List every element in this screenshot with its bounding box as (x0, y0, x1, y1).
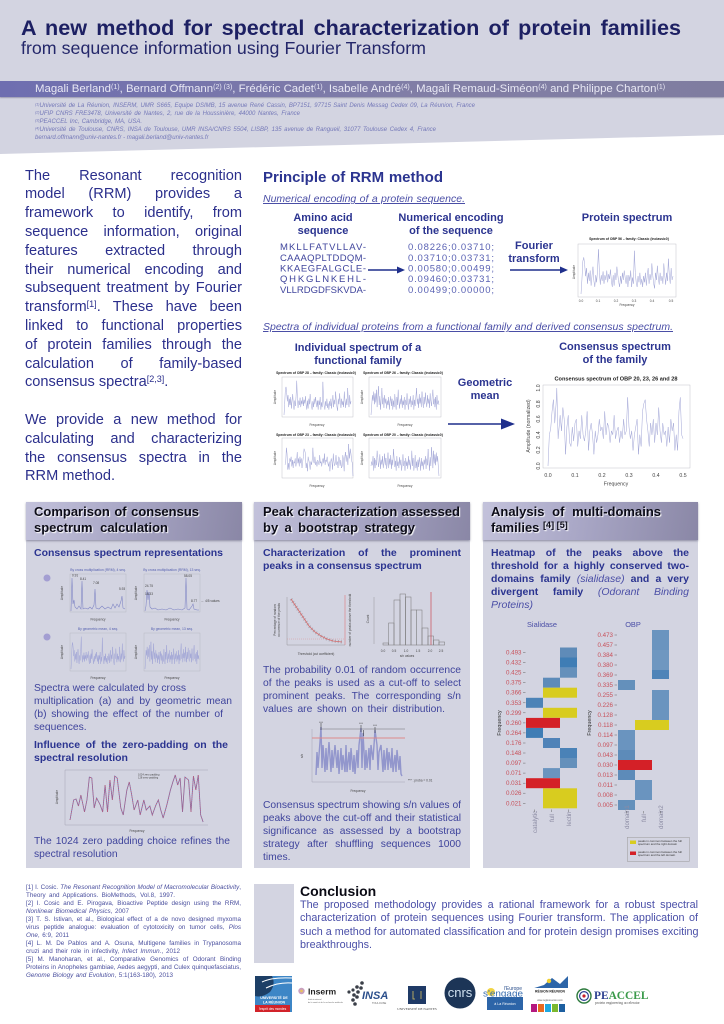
charts: individual spectra: Spectrum of OBP 20 – family: Classic (inclassic0) (363, 433, 443, 437)
conclusion text: breakthroughs. (300, 939, 372, 951)
column label: numerical encoding (398, 212, 504, 237)
heatmap: OBP: 0.380 (598, 662, 614, 669)
subheading: representations: Consensus spectrum representations (34, 547, 223, 559)
heatmap: sialidase: 0.148 (506, 750, 522, 757)
affiliations (35, 102, 475, 141)
label: fourier transform (508, 240, 560, 264)
text: heatmap description: divergent family (Odorant Binding (491, 586, 689, 598)
column label: amino acid (293, 212, 353, 237)
chart: s/n histogram: 1.0 (404, 649, 408, 653)
logo: Région Réunion (531, 976, 569, 1012)
arrow: encoding (368, 266, 405, 274)
conclusion text (300, 899, 698, 952)
panel title: multi-domains (491, 504, 661, 536)
affiliations: (3)PEACCEL Inc, Cambridge, MA, USA. (35, 118, 142, 125)
subtitle: from sequence information using Fourier Transform (21, 38, 426, 58)
chart: significant peaks (300, 721, 433, 793)
references: cruzi and their role in infectivity, Infect Immun., 2012 (26, 948, 180, 955)
heatmap: sialidase: 0.353 (506, 700, 522, 707)
heatmap: OBP: 0.457 (598, 642, 614, 649)
chart: zero padding (55, 770, 208, 833)
text: heatmap description: domains family (sialidase) and a very (491, 573, 689, 585)
conclusion text: characterization of protein sequences using Fourier transform. The application of (300, 912, 698, 924)
panel header: multi-domains (483, 502, 698, 540)
heatmap: sialidase: Sialidase (527, 620, 557, 629)
subheading: zero padding: spectral resolution (34, 752, 128, 764)
charts: individual spectra: Amplitude (360, 390, 364, 404)
chart: protein spectrum: 0.4 (650, 299, 654, 303)
heatmap: sialidase: 0.425 (506, 670, 522, 677)
text: spectra calculation (34, 683, 232, 733)
chart: protein spectrum: Spectrum of OBP 56 – family: Classic (inclassic0) (589, 237, 669, 241)
introduction text: sequence information, original (25, 224, 242, 240)
charts: consensus representations (44, 568, 220, 680)
text: spectra calculation: Spectra were calculated by cross (34, 683, 186, 694)
chart: significant peaks: *** (359, 722, 364, 726)
charts: consensus representations: By cross multiplication (RRM), 13 seq. (143, 568, 201, 572)
introduction text: subsequent treatment by Fourier (25, 280, 242, 296)
chart: random occurrence curve: number of peaks above the threshold (348, 593, 352, 646)
logo: Europe (483, 986, 523, 1010)
subheading: zero padding (34, 739, 228, 764)
heading: principle: Principle of RRM method (263, 168, 443, 186)
charts: individual spectra: Amplitude (273, 390, 277, 404)
chart: zero padding: 1024 zero padding (138, 772, 160, 776)
heatmap: sialidase: 0.071 (506, 770, 522, 777)
subheading: prominent peaks (263, 547, 461, 572)
column label: consensus spectrum (559, 340, 671, 366)
column label: individual spectrum: Individual spectrum of a (295, 342, 421, 354)
authors band (0, 81, 724, 97)
panel: comparison of consensus spectrum calculation (26, 502, 242, 868)
logos (250, 972, 660, 1016)
logo: Inserm (298, 986, 344, 1004)
introduction text: RRM method. (25, 468, 115, 484)
logo: INSA (347, 981, 388, 1006)
logo: INSA: TOULOUSE (372, 1001, 386, 1005)
charts: consensus representations: Frequency (164, 618, 180, 622)
charts: consensus representations: Amplitude (134, 586, 138, 600)
text: spectra calculation: multiplication (a) and by geometric mean (34, 696, 232, 707)
introduction text: framework to identify, from (25, 205, 242, 221)
panel header: peak characterization (254, 502, 470, 540)
title: A new method for spectral characterization of protein families (21, 14, 681, 40)
arrow: fourier (510, 266, 568, 274)
chart: protein spectrum: 0.1 (596, 299, 600, 303)
text: probability cut-off: prominent peaks. The corresponding s/n (263, 691, 461, 702)
references: Nonlinear Biomedical Physics, 2007 (26, 908, 129, 915)
heatmap: sialidase: 0.432 (506, 660, 522, 667)
chart: protein spectrum: 0.2 (614, 299, 618, 303)
charts: consensus representations: 0.91 (72, 574, 78, 578)
heatmap: OBP: 0.005 (598, 802, 614, 809)
text: probability cut-off (263, 665, 461, 715)
chart: significant peaks: *** : proba = 0.01 (408, 778, 433, 782)
chart: s/n histogram: 2.0 (428, 649, 432, 653)
logo: Université de La Réunion: l'esprit des mondes (259, 1007, 287, 1011)
charts: individual spectra: Amplitude (273, 451, 277, 465)
chart: consensus spectrum: 0.3 (625, 473, 633, 479)
chart: protein spectrum (572, 237, 676, 307)
heatmap: sialidase: 0.264 (506, 730, 522, 737)
introduction text: transform[1]. These have been (25, 299, 242, 315)
authors: Magali Berland(1), Bernard Offmann(2) (3), Frédéric Cadet(1), Isabelle André(4), Magali Remaud-Siméon(4) and Philippe Charton(1) (35, 83, 665, 95)
logo: Inserm: de la santé et de la recherche médicale (308, 1001, 344, 1004)
chart: consensus spectrum: Amplitude (normalized) (526, 399, 532, 453)
text: probability cut-off: of the peaks is used as a cut-off to select (263, 678, 461, 689)
panel: principle of RRM method (263, 168, 690, 488)
panel title: comparison (34, 504, 200, 536)
logo: PEACCEL (577, 989, 649, 1005)
column label: protein spectrum: Protein spectrum (582, 212, 672, 224)
column label: individual spectrum (295, 342, 422, 366)
chart: random occurrence curve: Percentage of random (273, 604, 277, 636)
affiliations: (2)UFIP CNRS FRE3478, Université de Nantes, 2, rue de la Houssinière, 44000 Nantes, France (35, 110, 300, 117)
text: zero padding conclusion: spectral resolution (34, 849, 118, 860)
charts: consensus representations: Frequency (164, 676, 180, 680)
heatmap: OBP: 0.128 (598, 712, 614, 719)
chart: protein spectrum: Frequency (619, 303, 635, 307)
logo: Europe: s'engage (483, 988, 523, 1000)
chart: s/n histogram (366, 592, 445, 658)
charts: consensus representations: 24.75 (145, 584, 153, 588)
introduction text: features extracted through (25, 243, 242, 259)
charts: individual spectra: Frequency (309, 484, 325, 488)
chart: consensus spectrum: 0.6 (536, 415, 542, 423)
references: Proteins in Anopheles gambiae, Aedes aegypti, and Culex quinquefasciatus, (26, 964, 241, 971)
logo: Université de Nantes: UNIVERSITÉ DE NANTES (397, 1006, 437, 1011)
introduction text: calculation of family-based (25, 356, 242, 372)
column label: individual spectrum: functional family (314, 354, 402, 366)
charts: consensus representations: 18.33 (145, 592, 153, 596)
chart: s/n histogram: 1.5 (416, 649, 420, 653)
conclusion text: The proposed methodology provides a rational framework for a robust spectral (300, 899, 698, 911)
arrow: geometric mean (448, 418, 515, 430)
charts: consensus representations: By geometric mean, 4 seq. (78, 627, 118, 631)
heatmap: OBP: 0.043 (598, 752, 614, 759)
chart: consensus spectrum: 0.8 (536, 400, 542, 408)
chart: random occurrence curve (273, 593, 352, 656)
charts: consensus representations: Frequency (90, 618, 106, 622)
panel title: multi-domains: Analysis of multi-domains (491, 504, 661, 519)
charts: consensus representations: By cross multiplication (RRM), 4 seq. (70, 568, 126, 572)
heatmap: OBP: 0.473 (598, 632, 614, 639)
chart: protein spectrum: Amplitude (572, 265, 576, 279)
text: bootstrap significance: strategy after shuffling sequences 1000 (263, 839, 461, 850)
logo: INSA: INSA (362, 990, 388, 1002)
logo: Université de La Réunion: LA RÉUNION (263, 1000, 286, 1004)
legend (627, 837, 690, 862)
numerical values: 0.08226;0.03710; (408, 242, 494, 253)
charts: consensus representations: Amplitude (134, 645, 138, 659)
column label: numerical encoding: of the sequence (409, 225, 493, 237)
column label: numerical encoding: Numerical encoding (398, 212, 504, 224)
logo: Région Réunion: www.regionreunion.com (537, 999, 563, 1002)
amino acid sequence: MKLLFATVLLAV- (280, 242, 366, 253)
text: heatmap description: Heatmap of the peaks above the (491, 547, 689, 559)
amino acid sequence (280, 242, 366, 296)
charts: individual spectra: Spectrum of OBP 23 – family: Classic (inclassic0) (276, 433, 356, 437)
heatmap: OBP: 0.097 (598, 742, 614, 749)
chart: s/n histogram: Count (366, 615, 370, 623)
subheading: prominent peaks: Characterization of the prominent (263, 547, 461, 559)
heatmap: sialidase: lectin (566, 811, 573, 826)
chart: random occurrence curve: occurrence of the peaks (277, 603, 281, 637)
introduction text (25, 168, 242, 484)
heatmap: sialidase: 0.366 (506, 690, 522, 697)
panel title: comparison: spectrum calculation (34, 520, 168, 535)
charts: individual spectra: Frequency (397, 484, 413, 488)
numerical values (408, 242, 494, 296)
heatmap: OBP (585, 620, 675, 836)
chart: consensus spectrum: Consensus spectrum of OBP 20, 23, 26 and 28 (554, 376, 678, 382)
heatmap: sialidase: 0.299 (506, 710, 522, 717)
chart: consensus spectrum: 0.0 (544, 473, 552, 479)
conclusion heading: Conclusion (300, 883, 376, 899)
chart: zero padding: 128 zero-padding (138, 776, 159, 780)
charts: consensus representations: 8.77 (191, 599, 197, 603)
chart: consensus spectrum: 0.5 (679, 473, 687, 479)
panel title: multi-domains: families [4] [5] (491, 520, 568, 535)
heatmap: sialidase: 0.021 (506, 800, 522, 807)
text: bootstrap significance: times. (263, 852, 290, 863)
subheading: spectra of individual proteins: Spectra of individual proteins from a functional family and derived consensus spectrum. (263, 321, 673, 333)
introduction text: The Resonant recognition (25, 168, 242, 184)
legend: peaks in common between the full (638, 850, 682, 854)
column label: amino acid: Amino acid (293, 212, 353, 224)
panel title: peak characterization: Peak characterization assessed (263, 504, 460, 519)
text: heatmap description (491, 547, 689, 612)
logo: Université de La Réunion (255, 976, 292, 1012)
references: [1] I. Cosic. The Resonant Recognition Model of Macromolecular Bioactivity, (26, 884, 241, 891)
numerical values: 0.03710;0.03731; (408, 253, 494, 264)
logo: PEACCEL: PEACCEL (594, 990, 649, 1002)
heatmap: OBP: domain1 (624, 805, 631, 829)
chart: s/n histogram: 0.5 (392, 649, 396, 653)
logo: Europe: à La Réunion (494, 1002, 516, 1006)
amino acid sequence: CAAAQPLTDDQM- (280, 253, 366, 264)
charts: individual spectra: Amplitude (360, 451, 364, 465)
panel: peak characterization (254, 502, 470, 868)
chart: consensus spectrum: 0.1 (571, 473, 579, 479)
heatmap: sialidase: 0.493 (506, 650, 522, 656)
text: bootstrap significance: Consensus spectrum showing s/n values of (263, 800, 461, 811)
chart: protein spectrum: 0.5 (669, 299, 673, 303)
conclusion text: such a method for automated classification and for protein design promises exciting (300, 926, 698, 938)
text: bootstrap significance: significance as assessed by a bootstrap (263, 826, 461, 837)
references: Theory and Applications. BioMethods, Vol.8, 1997. (26, 892, 175, 899)
numerical values: 0.00499;0.00000; (408, 285, 494, 296)
subheading: numerical encoding: Numerical encoding of a protein sequence. (263, 193, 465, 205)
amino acid sequence: QHKGLNKEHL- (280, 274, 366, 285)
chart: protein spectrum: 0.0 (579, 299, 583, 303)
heatmap: sialidase: 0.176 (506, 740, 522, 747)
heatmap: OBP: OBP (625, 620, 641, 629)
references: [3] T. S. Istivan, et al., Biological effect of a de novo designed myxoma (26, 916, 241, 923)
heatmap: OBP: 0.011 (598, 782, 614, 789)
chart: s/n histogram: 2.5 (439, 649, 443, 653)
introduction text: We provide a new method for (25, 412, 242, 428)
conclusion accent block (254, 884, 294, 963)
heatmap: sialidase: catalytic (532, 811, 539, 833)
header background (0, 0, 724, 154)
logo: Inserm: Inserm (308, 986, 337, 996)
logo: CNRS (444, 978, 476, 1008)
chart: consensus spectrum: 0.4 (536, 431, 542, 439)
references: Genome Biology and Evolution, 5:1(163-180), 2013 (26, 972, 173, 979)
text: zero padding conclusion: The 1024 zero padding choice refines the (34, 836, 230, 847)
label: geometric mean: mean (471, 390, 499, 402)
references: [4] L. M. De Pablos and A. Osuna, Multigene families in Trypanosoma (26, 940, 241, 947)
header banner (0, 0, 724, 154)
heatmap: OBP: 0.384 (598, 652, 614, 659)
heatmap: OBP: 0.255 (598, 692, 614, 699)
panel: analysis of multi-domains families (483, 502, 698, 868)
subheading: zero padding: Influence of the zero-padding on the (34, 739, 228, 751)
introduction text: model (RRM) provides a (25, 186, 242, 202)
chart: consensus spectrum: 0.2 (598, 473, 606, 479)
charts: consensus representations: Amplitude (60, 645, 64, 659)
logo: PEACCEL: protein engineering accelerator (595, 1001, 641, 1005)
heatmap: sialidase: 0.260 (506, 720, 522, 727)
heatmap: OBP: 0.226 (598, 702, 614, 709)
heatmap: OBP: full (641, 814, 648, 822)
charts: individual spectra: Spectrum of OBP 28 – family: Classic (inclassic0) (276, 371, 356, 375)
chart: consensus spectrum: 1.0 (536, 384, 542, 392)
logo: Université de La Réunion: UNIVERSITÉ DE (260, 995, 288, 1000)
charts: consensus representations: 7.08 (93, 581, 99, 585)
affiliations: bernard.offmann@univ-nantes.fr - magali.berland@univ-nantes.fr (35, 135, 209, 141)
chart: random occurrence curve: Threshold (cut coefficient) (298, 652, 334, 656)
amino acid sequence: VLLRDGDFSKVDA- (280, 285, 366, 296)
legend: peaks in common between the full (638, 839, 682, 843)
charts: individual spectra (273, 371, 443, 488)
heatmap: sialidase (495, 620, 585, 836)
affiliations: (4)Université de Toulouse, CNRS, INSA de Toulouse, UMR INSA/CNRS 5504, LISBP, 135 avenue de Rangueil, 31077 Toulouse Cedex 4, France (35, 126, 436, 133)
text: bootstrap significance (263, 800, 461, 863)
chart: s/n histogram: 0.0 (381, 649, 385, 653)
references: One, 6:9, 2011 (26, 932, 69, 939)
logo: Université de Nantes (397, 986, 437, 1011)
logo: Europe: l'Europe (504, 986, 522, 992)
text: heatmap description: threshold for a highly conserved two- (491, 560, 689, 572)
references: virus peptide analogue: evaluation of cytotoxicity on tumor cells, Plos (26, 924, 241, 931)
introduction text: calculating and characterizing (25, 431, 242, 447)
chart: significant peaks: Frequency (350, 789, 366, 793)
charts: consensus representations: Frequency (90, 676, 106, 680)
text: bootstrap significance: peaks above the cut-off and their statistical (263, 813, 461, 824)
panel header: comparison (26, 502, 242, 540)
heatmap: sialidase: 0.026 (506, 790, 522, 797)
chart: consensus spectrum: 0.4 (652, 473, 660, 479)
chart: protein spectrum: 0.3 (632, 299, 636, 303)
heatmap: OBP: 0.008 (598, 792, 614, 799)
introduction text: the consensus spectra in the (25, 450, 242, 466)
panel title: peak characterization (263, 504, 460, 536)
charts: consensus representations: 5.93 (119, 587, 125, 591)
heatmap: OBP: Frequency (587, 710, 593, 736)
chart: consensus spectrum: Frequency (604, 482, 629, 488)
chart: s/n histogram: s/n values (400, 654, 415, 658)
heatmap: OBP: 0.013 (598, 772, 614, 779)
charts: consensus representations: 58.05 (184, 574, 192, 578)
chart: significant peaks: *** (373, 724, 378, 728)
subheading: prominent peaks: peaks in a consensus spectrum (263, 560, 422, 572)
amino acid sequence: KKAEGFALGCLE- (280, 264, 366, 274)
introduction text: consensus spectra[2,3]. (25, 374, 168, 390)
label: fourier transform: Fourier (515, 240, 553, 252)
column label: amino acid: sequence (298, 225, 348, 237)
chart: consensus spectrum: 0.0 (536, 462, 542, 470)
charts: consensus representations: By geometric mean, 13 seq. (151, 627, 193, 631)
logo: Inserm: Institut national (308, 998, 322, 1001)
conclusion (254, 884, 699, 964)
heatmap: OBP: domain2 (658, 805, 665, 829)
introduction text: of protein families through the (25, 337, 242, 353)
charts: consensus representations: Amplitude (60, 586, 64, 600)
heatmap: sialidase: 0.097 (506, 760, 522, 767)
panel: comparison of consensus spectrum calculation: ← 4/5 values (201, 599, 220, 603)
charts: individual spectra: Spectrum of OBP 26 – family: Classic (inclassic0) (363, 371, 443, 375)
logo: CNRS: cnrs (448, 985, 473, 1000)
heatmap: OBP: 0.114 (598, 732, 614, 739)
chart: consensus spectrum: 0.2 (536, 446, 542, 454)
heatmap: OBP: 0.335 (598, 682, 614, 689)
heatmap: OBP: 0.118 (598, 722, 614, 729)
chart: significant peaks: s/n (300, 754, 304, 758)
charts: individual spectra: Frequency (309, 423, 325, 427)
text: zero padding conclusion (34, 836, 230, 860)
panel title: comparison: Comparison of consensus (34, 504, 199, 519)
affiliations: (1)Université de La Réunion, INSERM, UMR S665, Equipe DSIMB, 15 avenue René Cassin, BP7151, 97715 Saint Denis Messag Cedex 09, La Réunion, France (35, 102, 475, 109)
heatmap: OBP: 0.030 (598, 762, 614, 769)
legend: spectrum and the right domain (638, 842, 677, 846)
chart: consensus spectrum (526, 376, 690, 488)
introduction text: linked to functional properties (25, 318, 242, 334)
logo: Région Réunion: RÉGION RÉUNION (535, 988, 566, 994)
heatmap: sialidase: full (549, 814, 556, 822)
panel title: peak characterization: by a bootstrap strategy (263, 520, 415, 535)
label: fourier transform: transform (508, 252, 560, 264)
heatmap: sialidase: 0.031 (506, 780, 522, 787)
text: spectra calculation: sequences. (34, 722, 87, 733)
column label: consensus spectrum: of the family (583, 354, 647, 366)
introduction text: their numerical encoding and (25, 262, 242, 278)
references: [5] M. Manoharan, et al., Comparative Genomics of Odorant Binding (26, 956, 241, 963)
text: spectra calculation: (b) showing the effect of the number of (34, 709, 223, 720)
references (26, 884, 241, 980)
legend: spectrum and the left domain (638, 853, 676, 857)
text: probability cut-off: The probability 0.01 of random occurrence (263, 665, 461, 676)
numerical values: 0.09460;0.03731; (408, 274, 494, 285)
chart: zero padding: Amplitude (55, 790, 59, 804)
charts: consensus representations: 8.41 (80, 577, 86, 581)
numerical values: 0.00580;0.00499; (408, 264, 494, 274)
label: geometric mean (458, 376, 512, 402)
chart: zero padding: Frequency (129, 829, 145, 833)
heatmap: OBP: 0.369 (598, 672, 614, 679)
heatmap: sialidase: Frequency (497, 710, 503, 736)
chart: significant peaks: *** (319, 721, 324, 725)
charts: individual spectra: Frequency (397, 423, 413, 427)
references: [2] I. Cosic and E. Pirogava, Bioactive Peptide design using the RRM, (26, 900, 241, 907)
heatmap: sialidase: 0.375 (506, 680, 522, 687)
text: heatmap description: Proteins) (491, 599, 533, 611)
label: geometric mean: Geometric (458, 376, 512, 388)
text: probability cut-off: values are shown on their distribution. (263, 704, 445, 715)
column label: consensus spectrum: Consensus spectrum (559, 340, 671, 352)
